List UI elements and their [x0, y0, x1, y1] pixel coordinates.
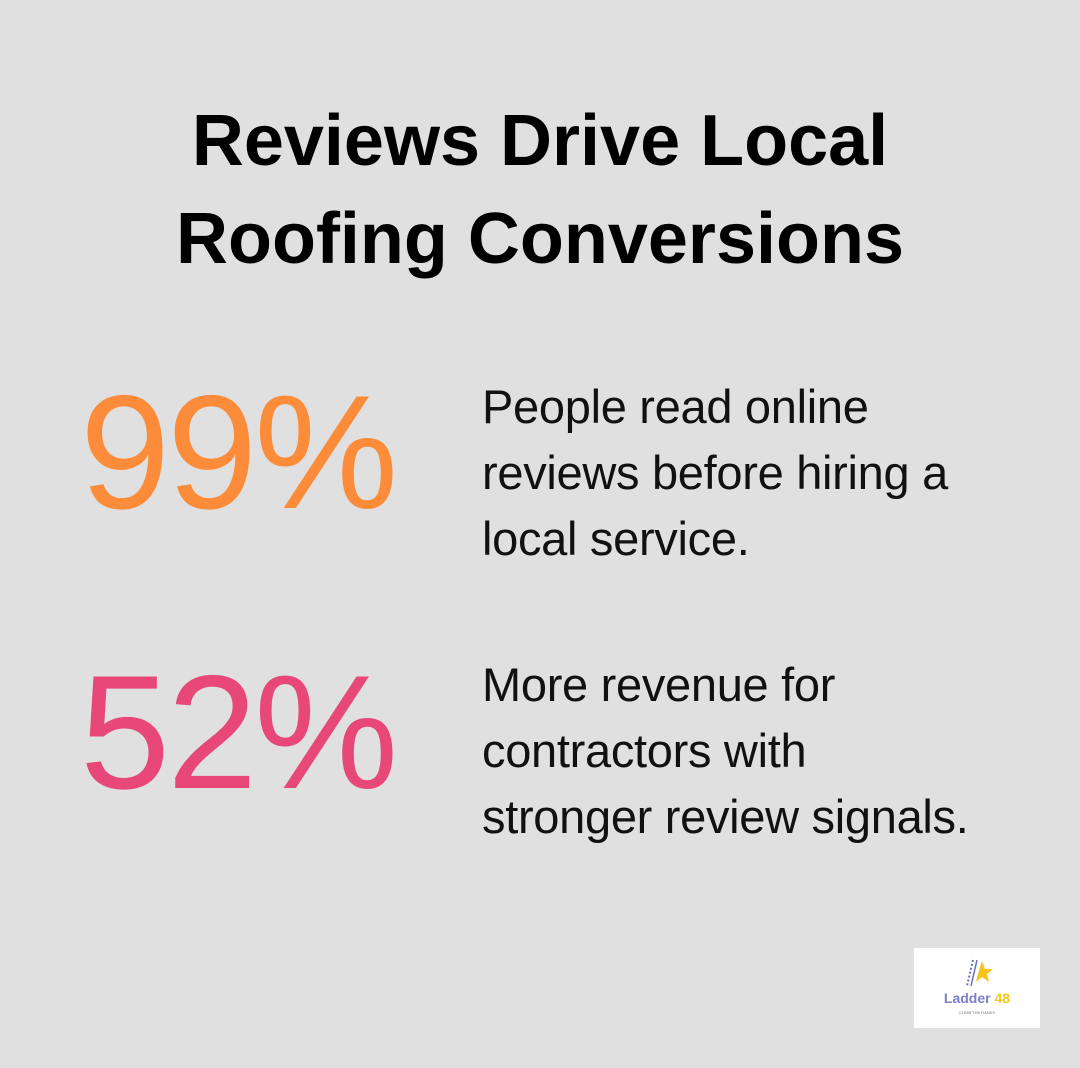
title: [176, 101, 904, 279]
text: 99% description: reviews before hiring a: [482, 446, 948, 499]
text: 52% description: More revenue for: [482, 658, 835, 711]
text: 99% description: local service.: [482, 512, 749, 565]
stat: 52%: 52%: [80, 642, 395, 823]
text: 99% description: People read online: [482, 380, 869, 433]
text: 52% description: [482, 658, 969, 843]
logo: Ladder 48: [914, 948, 1040, 1028]
logo: Ladder 48: CLIMB THE RANKS: [959, 1010, 995, 1015]
text: 52% description: contractors with: [482, 724, 806, 777]
icon: star and ladder: [966, 960, 993, 986]
text: 99% description: [482, 380, 948, 565]
text: 52% description: stronger review signals.: [482, 790, 969, 843]
stat: 99%: 99%: [80, 362, 395, 543]
title: Reviews Drive Local: [192, 101, 888, 181]
title: Roofing Conversions: [176, 199, 904, 279]
text: logo name: Ladder 48: [944, 990, 1010, 1006]
